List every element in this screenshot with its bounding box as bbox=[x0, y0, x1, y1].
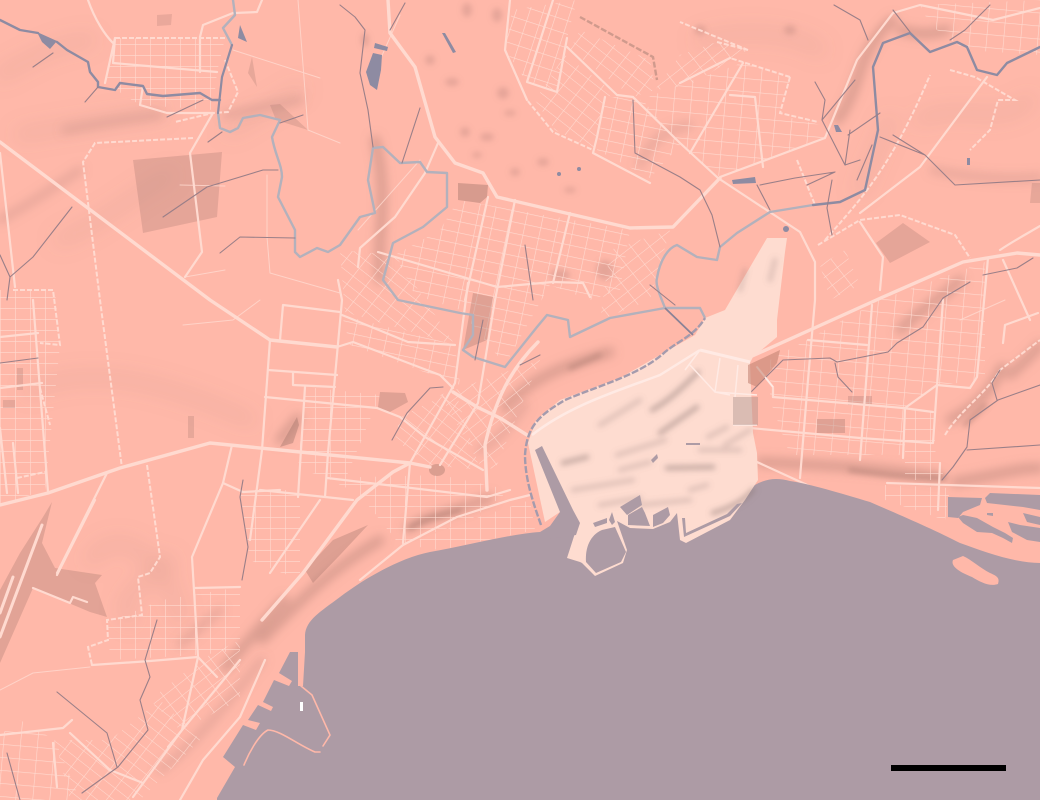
industrial parcel bbox=[733, 397, 758, 425]
harbour basins bbox=[586, 443, 742, 573]
brown-grey dashed track bbox=[580, 17, 657, 80]
canal along highlighted zone bbox=[525, 318, 705, 525]
streets inside highlighted zone bbox=[532, 350, 773, 435]
canal link bbox=[665, 308, 693, 335]
port breakwaters bbox=[244, 686, 330, 765]
water: bay and sea bbox=[217, 479, 1040, 800]
lakes and ponds bbox=[37, 25, 970, 232]
relief in highlighted zone bbox=[563, 260, 775, 513]
dashed boundary paths bbox=[13, 22, 1040, 665]
harbour inlet bbox=[535, 446, 580, 540]
light highlighted zone bbox=[528, 238, 787, 576]
hillshade spots bbox=[361, 3, 796, 281]
fringe parcel east of zone bbox=[748, 350, 780, 387]
coastal lagoons bbox=[948, 493, 1040, 543]
scale bar bbox=[891, 765, 1006, 771]
sand island bbox=[953, 556, 999, 585]
white pier marker bbox=[300, 702, 303, 711]
